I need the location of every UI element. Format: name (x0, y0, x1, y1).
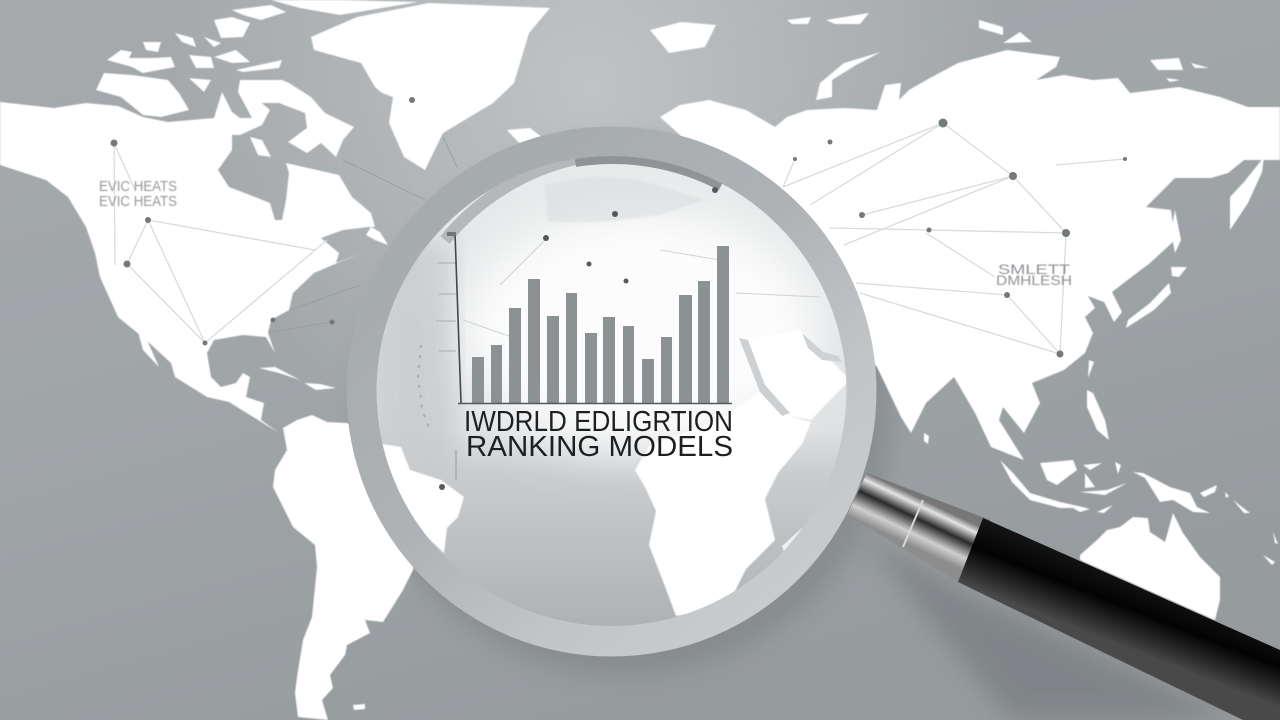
persian gulf (802, 333, 842, 362)
metal collar (847, 473, 990, 583)
taiwan and philippines (1087, 360, 1109, 440)
axis tick marks (436, 263, 456, 351)
upper bevel dark (575, 157, 722, 184)
baja california (137, 328, 159, 367)
magnified land (382, 330, 850, 616)
new siberian islands (1150, 58, 1209, 82)
sakhalin (1171, 210, 1181, 253)
south america (273, 415, 420, 720)
chart title: IWDRLD EDLIGRTION (464, 406, 733, 438)
network lines over sea (270, 137, 457, 332)
small vertical mark (455, 450, 457, 480)
north america (0, 80, 375, 433)
network nodes (110, 97, 1127, 358)
red sea (739, 338, 790, 416)
faint label: north america (99, 178, 177, 210)
severnaya zemlya (979, 20, 1032, 43)
axis top knob (447, 232, 456, 236)
borneo (1040, 460, 1077, 485)
lens shadow (357, 140, 893, 676)
black grip (958, 518, 1280, 720)
new guinea (1133, 472, 1210, 513)
faint map lines in glass (463, 240, 820, 340)
arctic islands (96, 0, 418, 117)
falkland islands (353, 704, 365, 710)
central highlight (460, 210, 820, 450)
greenland (311, 3, 550, 170)
chart title: RANKING MODELS (466, 431, 733, 463)
lens glass (370, 156, 850, 626)
bars (472, 246, 729, 403)
faint label: asia (996, 261, 1072, 288)
dotted arc (418, 345, 430, 430)
sumatra and java (1000, 460, 1087, 508)
handle shadow (860, 530, 1240, 720)
horizontal axis (458, 402, 732, 404)
iceland (507, 128, 543, 144)
sri lanka (924, 433, 929, 444)
bar chart (447, 232, 732, 404)
magnified nodes (439, 187, 718, 490)
faint label: asia: SMLETT (998, 261, 1071, 277)
eurasia (660, 50, 1280, 460)
lesser sunda islands (1066, 483, 1127, 513)
pacific islands (1200, 485, 1278, 565)
vertical axis (455, 233, 461, 403)
sulawesi (1083, 462, 1121, 488)
south america fragment (382, 444, 464, 553)
faint label: north america: EVIC HEATS (99, 178, 177, 195)
island north of hudson bay (250, 137, 271, 157)
madagascar (782, 528, 802, 552)
baffin island (243, 80, 354, 157)
lens rim (346, 126, 876, 656)
chart title (464, 406, 733, 463)
upper bevel light (445, 158, 580, 240)
australia (1080, 513, 1220, 620)
africa (635, 391, 811, 616)
novaya zemlya (816, 52, 881, 100)
svalbard (650, 22, 716, 53)
left glass shade (370, 240, 456, 470)
arabia (743, 330, 850, 420)
cuba and hispaniola (259, 367, 300, 380)
glass fill (376, 156, 846, 626)
japan (1126, 267, 1187, 328)
pale magnified land (545, 176, 705, 222)
faint label: asia: DMHLESH (996, 272, 1072, 288)
collar groove (903, 500, 923, 547)
nova scotia and newfoundland (366, 227, 388, 245)
faint label: north america: EVIC HEATS (99, 193, 177, 210)
franz josef land (787, 13, 869, 24)
magnifying glass handle (847, 473, 1280, 720)
network lines on land (114, 123, 1125, 354)
kamchatka (1230, 157, 1264, 230)
